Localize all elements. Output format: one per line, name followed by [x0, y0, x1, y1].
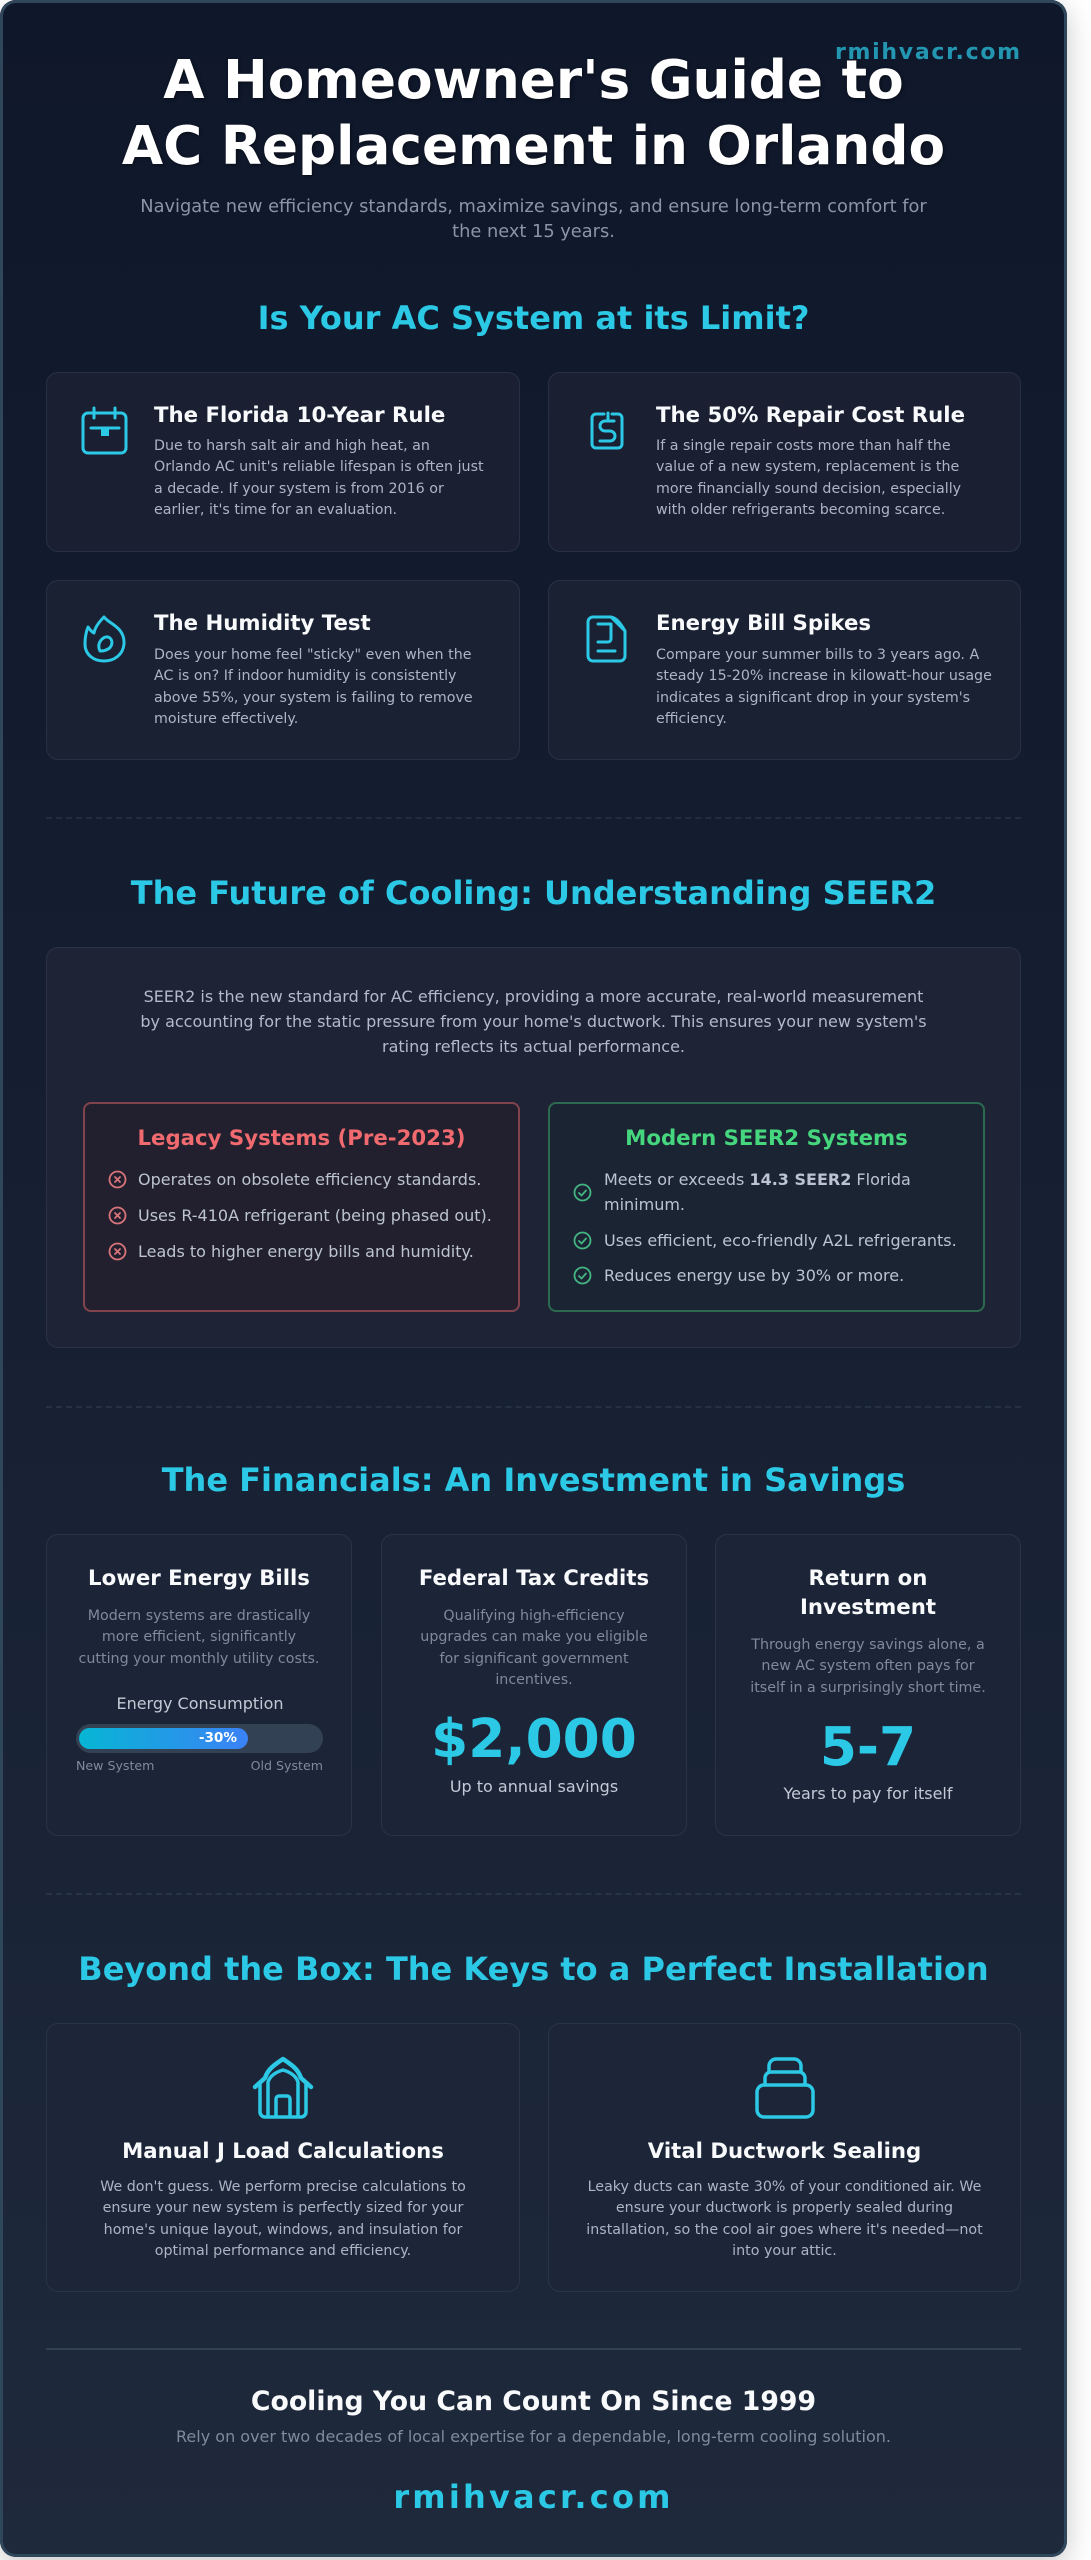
- card text: ensure your ductwork is properly sealed during: [616, 2200, 953, 2216]
- card text: Leaky ducts can waste 30% of your conditioned air. We: [588, 2179, 981, 2195]
- card text: itself in a surprisingly short time.: [750, 1680, 986, 1696]
- title: AC Replacement in Orlando: [122, 115, 945, 177]
- panel: The 50% Repair Cost Rule: [548, 372, 1021, 552]
- panel: Manual J Load Calculations: [46, 2023, 520, 2292]
- card text: [154, 438, 484, 518]
- card text: AC is on? If indoor humidity is consistently: [154, 668, 456, 684]
- card title: The 50% Repair Cost Rule: [656, 403, 965, 428]
- legacy heading: Legacy Systems (Pre-2023): [137, 1126, 466, 1151]
- card text: with older refrigerants becoming scarce.: [656, 502, 945, 518]
- stat caption: Years to pay for itself: [783, 1784, 953, 1803]
- card text: Orlando AC unit's reliable lifespan is often just: [154, 459, 484, 475]
- intro text: rating reflects its actual performance.: [382, 1037, 685, 1056]
- card text: new AC system often pays for: [761, 1658, 975, 1674]
- bar track: [76, 1724, 323, 1753]
- stat: $2,000: $2,000: [431, 1708, 637, 1770]
- icon: ductwork: [755, 2057, 815, 2119]
- card text: earlier, it's time for an evaluation.: [154, 502, 397, 518]
- card text: [656, 438, 961, 518]
- stat caption: Up to annual savings: [450, 1777, 618, 1796]
- stat: 5-7: 5-7: [820, 1716, 916, 1778]
- card text: cutting your monthly utility costs.: [79, 1651, 319, 1667]
- card text: into your attic.: [732, 2243, 837, 2259]
- panel: Federal Tax Credits: [381, 1534, 687, 1836]
- card text: Does your home feel "sticky" even when the: [154, 647, 472, 663]
- card text: optimal performance and efficiency.: [155, 2243, 411, 2259]
- card text: Modern systems are drastically: [88, 1608, 310, 1624]
- card text: steady 15-20% increase in kilowatt-hour usage: [656, 668, 992, 684]
- card title: [800, 1566, 936, 1620]
- card title: Investment: [800, 1595, 936, 1620]
- icon: house: [252, 2056, 314, 2119]
- icon: calendar: [82, 406, 128, 454]
- panel: The Florida 10-Year Rule: [46, 372, 520, 552]
- intro text: [140, 987, 927, 1056]
- card text: home's unique layout, windows, and insulation for: [104, 2222, 462, 2238]
- panel: Lower Energy Bills: [46, 1534, 352, 1836]
- panel: Return on Investment: [715, 1534, 1021, 1836]
- card text: more financially sound decision, especially: [656, 481, 961, 497]
- card text: Through energy savings alone, a: [751, 1637, 985, 1653]
- card text: [154, 647, 473, 727]
- heading: The Financials: The Financials: An Investment in Savings: [162, 1461, 905, 1499]
- panel: modern systems: [548, 1102, 985, 1312]
- heading: Beyond the Box: Beyond the Box: The Keys to a Perfect Installation: [78, 1950, 989, 1988]
- icon: x circle: [108, 1206, 126, 1224]
- panel: Vital Ductwork Sealing: [548, 2023, 1021, 2292]
- icon: x circle: [108, 1170, 126, 1188]
- panel: Energy Bill Spikes: [548, 580, 1021, 760]
- card text: moisture effectively.: [154, 711, 298, 727]
- card text: upgrades can make you eligible: [420, 1629, 648, 1645]
- bar fill: [79, 1728, 248, 1749]
- icon: dollar document: [590, 412, 624, 450]
- card text: [100, 2179, 466, 2259]
- card text: If a single repair costs more than half the: [656, 438, 951, 454]
- label: new system: New System: [76, 1758, 154, 1773]
- card text: [750, 1637, 986, 1696]
- modern item 2: Uses efficient, eco-friendly A2L refrigerants.: [604, 1231, 957, 1250]
- panel: legacy systems: [83, 1102, 520, 1312]
- card text: installation, so the cool air goes where it's needed—not: [586, 2222, 983, 2238]
- icon: x circle: [108, 1242, 126, 1260]
- legacy item 3: Leads to higher energy bills and humidity.: [138, 1242, 474, 1261]
- card text: for significant government: [439, 1651, 629, 1667]
- card title: Manual J Load Calculations: [122, 2139, 444, 2164]
- label: old system: Old System: [251, 1758, 323, 1773]
- subtitle: Navigate new efficiency standards, maximize savings, and ensure long-term comfort for: [140, 196, 927, 217]
- footer heading: Cooling You Can Count On Since 1999: [251, 2386, 816, 2417]
- legacy item 1: Operates on obsolete efficiency standards.: [138, 1170, 481, 1189]
- card text: [79, 1608, 319, 1667]
- modern heading: Modern SEER2 Systems: [625, 1126, 908, 1151]
- modern item 1: Meets or exceeds 14.3 SEER2 Florida: [604, 1170, 911, 1189]
- title: [122, 49, 945, 177]
- heading: Is Your AC System at its Limit?: Is Your AC System at its Limit?: [258, 299, 809, 337]
- card text: indicates a significant drop in your system's: [656, 690, 970, 706]
- heading: The Future of Cooling: The Future of Cooling: Understanding SEER2: [131, 874, 936, 912]
- card text: Due to harsh salt air and high heat, an: [154, 438, 430, 454]
- card title: The Florida 10-Year Rule: [154, 403, 445, 428]
- title: A Homeowner's Guide to: [163, 49, 904, 111]
- card text: more efficient, significantly: [102, 1629, 296, 1645]
- card text: ensure your new system is perfectly sized for your: [103, 2200, 463, 2216]
- card title: Federal Tax Credits: [419, 1566, 649, 1591]
- icon: flame: [84, 615, 126, 662]
- card text: a decade. If your system is from 2016 or: [154, 481, 444, 497]
- card text: value of a new system, replacement is the: [656, 459, 959, 475]
- card text: [420, 1608, 648, 1688]
- card title: Lower Energy Bills: [88, 1566, 310, 1591]
- icon: document: [586, 616, 626, 662]
- footer url: rmihvacr.com: [393, 2478, 674, 2516]
- card title: Return on: [809, 1566, 927, 1591]
- subtitle: the next 15 years.: [452, 221, 615, 242]
- intro text: SEER2 is the new standard for AC efficiency, providing a more accurate, real-world measurement: [144, 987, 923, 1006]
- icon: check circle: [574, 1184, 592, 1202]
- chart label: Energy Consumption: [116, 1694, 284, 1713]
- card text: efficiency.: [656, 711, 727, 727]
- panel: SEER2 explainer: [46, 947, 1021, 1348]
- modern item 3: Reduces energy use by 30% or more.: [604, 1266, 904, 1285]
- card text: Compare your summer bills to 3 years ago. A: [656, 647, 979, 663]
- watermark: rmihvacr.com: rmihvacr.com: [835, 40, 1022, 65]
- footer text: Rely on over two decades of local expertise for a dependable, long-term cooling solution.: [176, 2427, 891, 2446]
- panel: The Humidity Test: [46, 580, 520, 760]
- legacy item 2: Uses R-410A refrigerant (being phased out).: [138, 1206, 492, 1225]
- icon: check circle: [574, 1266, 592, 1284]
- subtitle: [140, 196, 927, 242]
- modern item 1: [574, 1170, 911, 1214]
- card text: incentives.: [495, 1672, 573, 1688]
- modern item 1: minimum.: [604, 1195, 685, 1214]
- card title: Energy Bill Spikes: [656, 611, 871, 636]
- card text: [586, 2179, 983, 2259]
- icon: check circle: [574, 1232, 592, 1250]
- card text: Qualifying high-efficiency: [443, 1608, 625, 1624]
- card text: We don't guess. We perform precise calculations to: [100, 2179, 466, 2195]
- card text: above 55%, your system is failing to remove: [154, 690, 473, 706]
- bar chart: energy consumption: [76, 1694, 323, 1773]
- card title: The Humidity Test: [154, 611, 371, 636]
- bar fill: -30%: [199, 1730, 237, 1746]
- card text: [656, 647, 992, 727]
- card title: Vital Ductwork Sealing: [648, 2139, 921, 2164]
- intro text: by accounting for the static pressure from your home's ductwork. This ensures your new system's: [140, 1012, 927, 1031]
